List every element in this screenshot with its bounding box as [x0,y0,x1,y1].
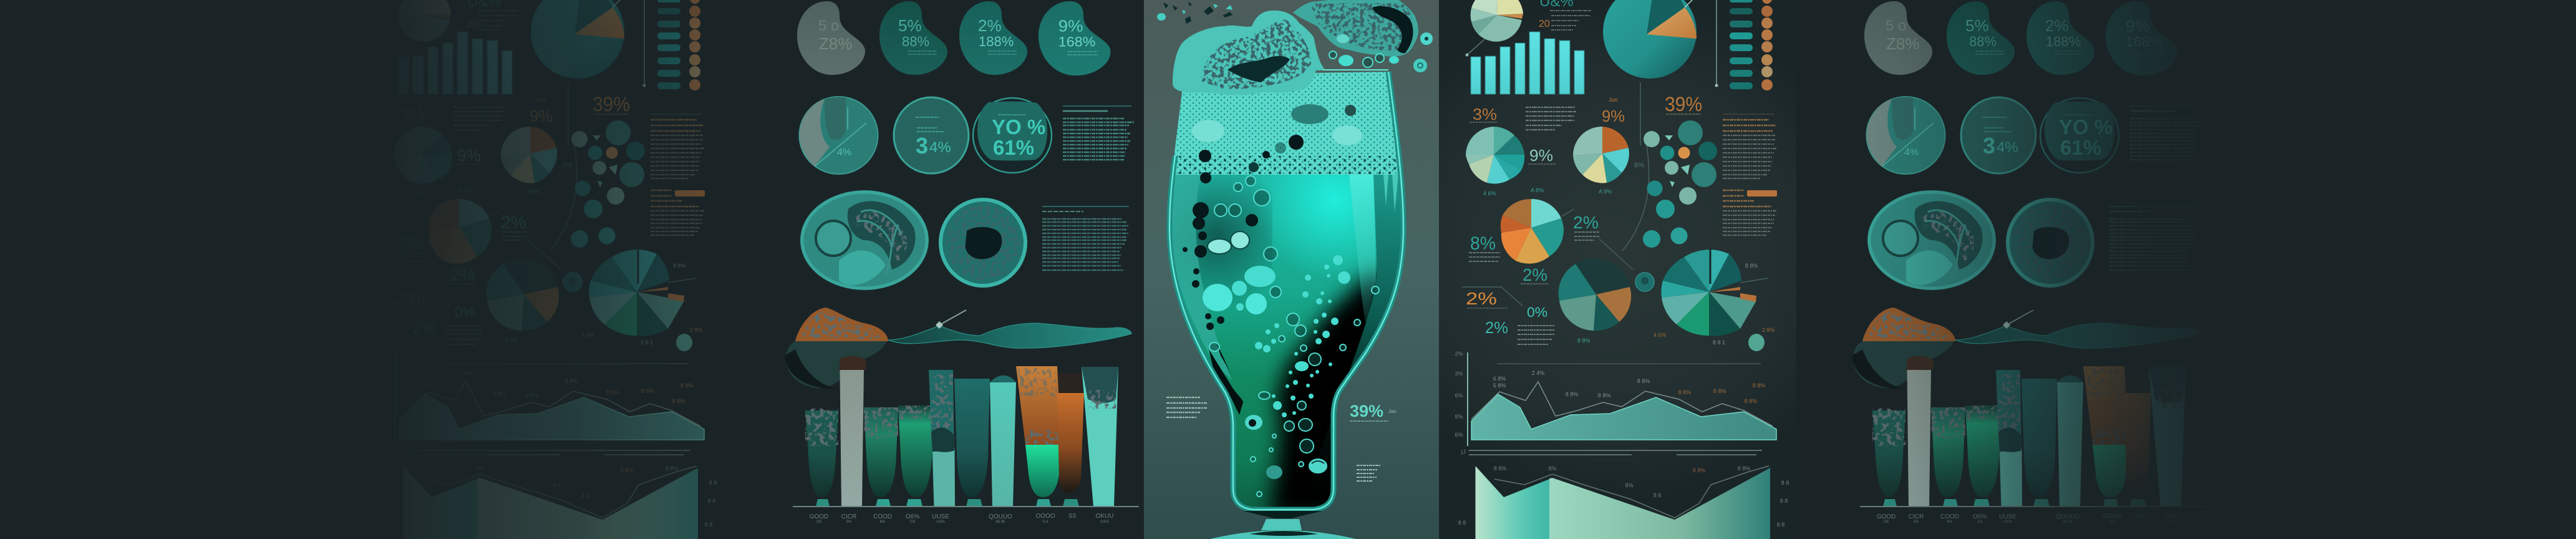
small captions: 8 8% [1577,337,1591,344]
gauge circle 3: YO % [992,115,1045,138]
droplet badge 3: 2% [978,16,1002,35]
droplet badge 4: 9% [1058,17,1083,35]
wave chart with orange dome [785,308,1131,389]
area line chart top: 2% [1455,351,1463,357]
bar labels: US% [936,520,945,524]
small captions: 2 8% [1762,327,1775,333]
bar 10 [1082,367,1118,507]
2% teal label: 2% [1485,318,1508,337]
small captions: 8 8% [1745,263,1758,269]
panel: charts backdrop [1439,0,1796,539]
bar labels: US% [1100,520,1109,524]
area line chart top [1455,351,1776,446]
bubbles in the liquid [1192,231,1379,497]
area chart bottom: 8 8 [1780,498,1788,504]
text block 1 [1063,106,1134,160]
small labels row: A 9% [1599,188,1612,195]
infographic canvas [417,0,2186,539]
orange tinted text block [1723,114,1776,178]
area line chart top: 8 8% [1598,392,1610,399]
bar labels: O6% [906,513,919,520]
area chart bottom: 8 8 [1777,522,1784,528]
legend pills [1730,0,1753,89]
gauge circle 2: 4% [929,139,951,156]
left annotation text [1166,397,1208,417]
2% teal label with lines: 2% [1573,213,1599,232]
bar labels: 5% [846,520,852,524]
droplet badge 2: 88% [902,34,929,49]
left fade veil [349,0,786,539]
2% orange label with curve: 2% [1466,289,1497,308]
2% teal label with lines [1573,213,1599,240]
area line chart top: 8 8% [1713,388,1726,394]
gauge circle 3 [973,98,1052,173]
glasses and bars chart [793,356,1139,524]
bar labels: S3 [1068,513,1077,520]
small badge circle [1635,273,1654,291]
bubble cluster [1643,120,1717,248]
pie B [1573,127,1629,183]
connector line [1622,82,1649,251]
droplet badge 3 [959,1,1027,75]
9% orange heading [1602,97,1625,125]
gauge circle 1 [800,97,878,174]
bar labels: UUSE [932,513,949,520]
area line chart top: 2 4% [1532,370,1544,376]
orange 20 label: 20 [1539,19,1550,29]
connector to small circle [1599,239,1633,270]
panel: centre beer glass [1157,0,1433,539]
bar 5 [929,370,955,507]
double rules [1469,450,1762,455]
area line chart top: 8 8% [1566,391,1578,397]
gauge circle 2 [894,97,969,173]
bar labels: QOUUO [989,513,1012,520]
39% heading: 39% [1665,93,1702,115]
pie C orange [1501,199,1574,264]
faded left copy of the charts panel [382,0,717,539]
small labels row [1483,187,1612,197]
bar labels: OOOO [1035,513,1055,520]
droplet badge 1 [797,1,865,75]
39% callout: Jan [1388,409,1397,414]
faded right glass ghost [2227,0,2503,539]
area chart bottom: 8 8% [1693,467,1705,473]
bar labels: GOOD [810,513,828,520]
area chart bottom: 8 8% [1494,465,1506,472]
0% teal label: 0% [1527,304,1547,320]
area chart bottom [1458,449,1789,539]
small labels row: 4 6% [1483,190,1496,197]
foam lumps and dark bubbles [1183,104,1362,274]
bar labels: O3 [910,520,916,524]
foam cloud left [1173,11,1324,95]
9% orange heading: 9% [1602,107,1625,125]
area line chart top: 8 8% [1637,378,1650,384]
bar labels: OKUU [1096,513,1113,520]
area line chart top: 3% [1455,371,1463,377]
area chart bottom: 8 8 [1458,520,1466,526]
area chart bottom: 8 8% [1738,465,1750,472]
area chart bottom: 8 8 [1781,480,1789,486]
floating bubbles above the glass [1157,2,1433,72]
area line chart top: 8 8% [1753,382,1765,389]
droplet badge 4: 168% [1058,34,1095,50]
pie A [1466,127,1524,184]
big pie top centre [1603,0,1697,79]
droplet badge 3: 188% [979,34,1014,49]
gauge circle 2: 3 [916,133,928,158]
glass 1 [805,409,838,507]
orange bar text block [1723,190,1777,235]
chart baseline [793,506,1139,507]
bar labels: 85 85 [995,520,1005,524]
2% orange label with curve [1462,287,1523,308]
bar labels: 8% [880,520,886,524]
text block 2 [1042,206,1129,270]
area chart bottom: 8% [1548,465,1557,472]
glass 3 [864,407,898,507]
droplet badge 1: 5 o [818,17,839,34]
right fade veil [1840,0,2576,539]
orange bar 9 [1057,373,1084,507]
bar labels: CICR [841,513,856,520]
text lines under 0% [1518,326,1554,344]
droplet badge 4 [1039,1,1111,75]
glass 4 [898,405,934,507]
39% callout [1350,402,1397,421]
orange bar 8 [1016,366,1061,446]
droplet badge 2 [879,1,947,75]
bar labels: O5 [816,520,822,524]
small captions: 8 8 1 [1713,339,1725,346]
3% heading: 3% [1473,105,1497,124]
legend dots [1761,0,1773,90]
area line chart top: 8% [1455,414,1463,420]
8% teal label with lines [1469,233,1500,261]
bar labels: COOD [873,513,892,520]
small 8% label: 8% [1634,162,1644,169]
bar labels: 5 8 [1043,520,1048,524]
panel: centre backdrop [1144,0,1439,539]
green glass 8 [1025,445,1062,507]
small labels row: A 8% [1531,187,1544,193]
2% label mid: 2% [1523,265,1547,284]
9% teal label: 9% [1529,146,1553,165]
area line chart top: 6% [1455,392,1463,399]
area chart bottom: 8% [1625,482,1634,488]
illustration: big swirl dish [800,190,929,290]
bar 2 [839,356,866,507]
bar 7 [990,376,1016,507]
area line chart top: 6 8% [1493,376,1506,382]
bar chart [1471,32,1584,94]
text block above pies [1526,107,1576,130]
9% orange heading: Jun [1609,97,1618,103]
8% teal label with lines: 8% [1470,233,1496,254]
area chart bottom: (J [1461,449,1466,455]
area line chart top: 5 8% [1493,382,1506,389]
bar labels [810,513,1113,524]
small captions: 4 6% [1654,332,1667,338]
gauge circle 3: 61% [993,136,1034,159]
gauge circle 1: 4% [837,147,851,158]
glass 6 [954,379,990,507]
bottom small circle [1748,334,1765,351]
area line chart top: 8 8% [1678,389,1691,396]
vertical rule with dot [1715,0,1718,87]
top text lines [1550,11,1591,30]
pie D [1559,258,1631,331]
illustration: speckled dish [941,200,1025,286]
glass body [1160,62,1410,518]
39% callout: 39% [1350,402,1383,420]
faded right copy of the petri dish panel [1852,1,2206,524]
lower right annotation text [1357,465,1380,481]
panel: petri dishes and glasses [785,1,1139,524]
glass stem and base [1210,511,1356,539]
small captions [1577,263,1775,346]
small pie top [1466,0,1523,56]
area chart bottom: 8 8 [1654,492,1661,498]
droplet badge 1: Z8% [819,34,852,53]
area line chart top: 6% [1455,432,1463,438]
droplet badge 2: 5% [898,16,922,35]
foam cloud right [1293,0,1418,57]
pie E [1661,248,1768,336]
panel: charts [1455,0,1789,539]
area line chart top: 8 8% [1745,398,1757,404]
